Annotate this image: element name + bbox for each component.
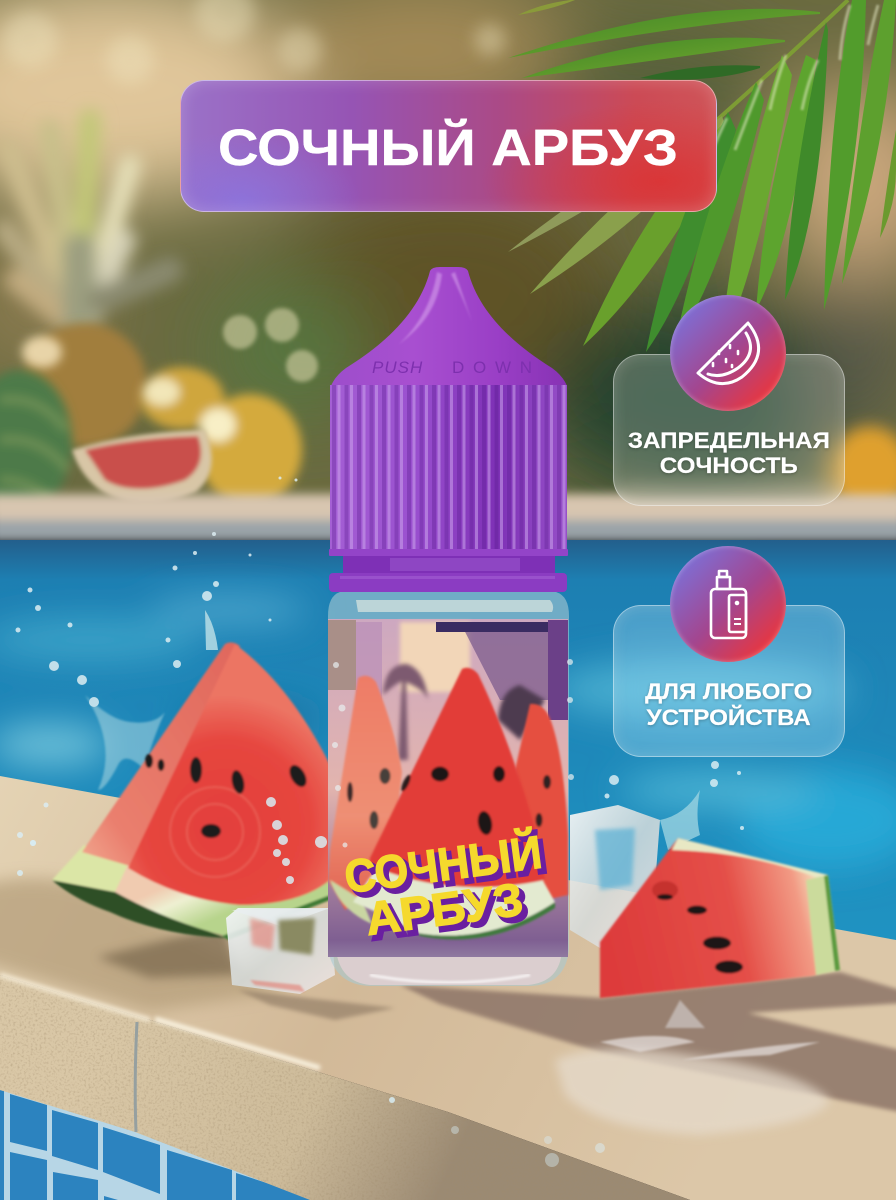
- background: fruit pile: [0, 367, 896, 514]
- label title: АРБУЗ: [367, 877, 531, 949]
- ice cube left: [226, 908, 335, 994]
- watermelon wedge left: [52, 642, 330, 940]
- icon: vape device badge: [670, 546, 786, 662]
- bottle droplets: [332, 659, 574, 848]
- bottle: [328, 267, 574, 986]
- bottle label art: [328, 619, 574, 957]
- pool wall tiles: [0, 1085, 320, 1200]
- background: blurred garden: [0, 0, 896, 510]
- panel text: ЗАПРЕДЕЛЬНАЯ: [628, 428, 830, 453]
- palm leaves: [508, 0, 896, 352]
- panel: juiciness: [613, 354, 845, 506]
- title banner: [180, 80, 717, 212]
- bottle cap: [329, 267, 568, 592]
- icon: watermelon badge: [670, 295, 786, 411]
- panel text: [628, 428, 830, 478]
- ice cube right: [570, 790, 700, 948]
- label title: СОЧНЫЙ: [342, 826, 545, 903]
- bottle glass: [328, 592, 569, 986]
- bottle cap: DOWN: [452, 358, 532, 377]
- water splash left: [16, 476, 298, 846]
- background: pool edge: [0, 494, 896, 542]
- panel text: [644, 679, 813, 730]
- water drops around right: [17, 761, 744, 1167]
- panel text: СОЧНОСТЬ: [660, 453, 798, 478]
- label title: [342, 825, 549, 950]
- panel text: ДЛЯ ЛЮБОГО: [645, 679, 813, 704]
- title text: СОЧНЫЙ АРБУЗ: [218, 118, 677, 176]
- watermelon wedge right: [600, 838, 840, 998]
- stone ledge front face: [0, 975, 690, 1200]
- background: pineapple: [5, 120, 170, 447]
- swimming pool: [0, 540, 896, 940]
- melon slice right on label: [515, 704, 568, 900]
- panel text: УСТРОЙСТВА: [647, 705, 811, 730]
- stone ledge top: [0, 776, 896, 1200]
- bottle cap: PUSH: [372, 358, 423, 377]
- melon slice center on label: [353, 668, 555, 940]
- label title: СОЧНЫЙ: [346, 830, 549, 907]
- melon slice left on label: [328, 676, 402, 924]
- panel: any device: [613, 605, 845, 757]
- label title: АРБУЗ: [363, 873, 526, 945]
